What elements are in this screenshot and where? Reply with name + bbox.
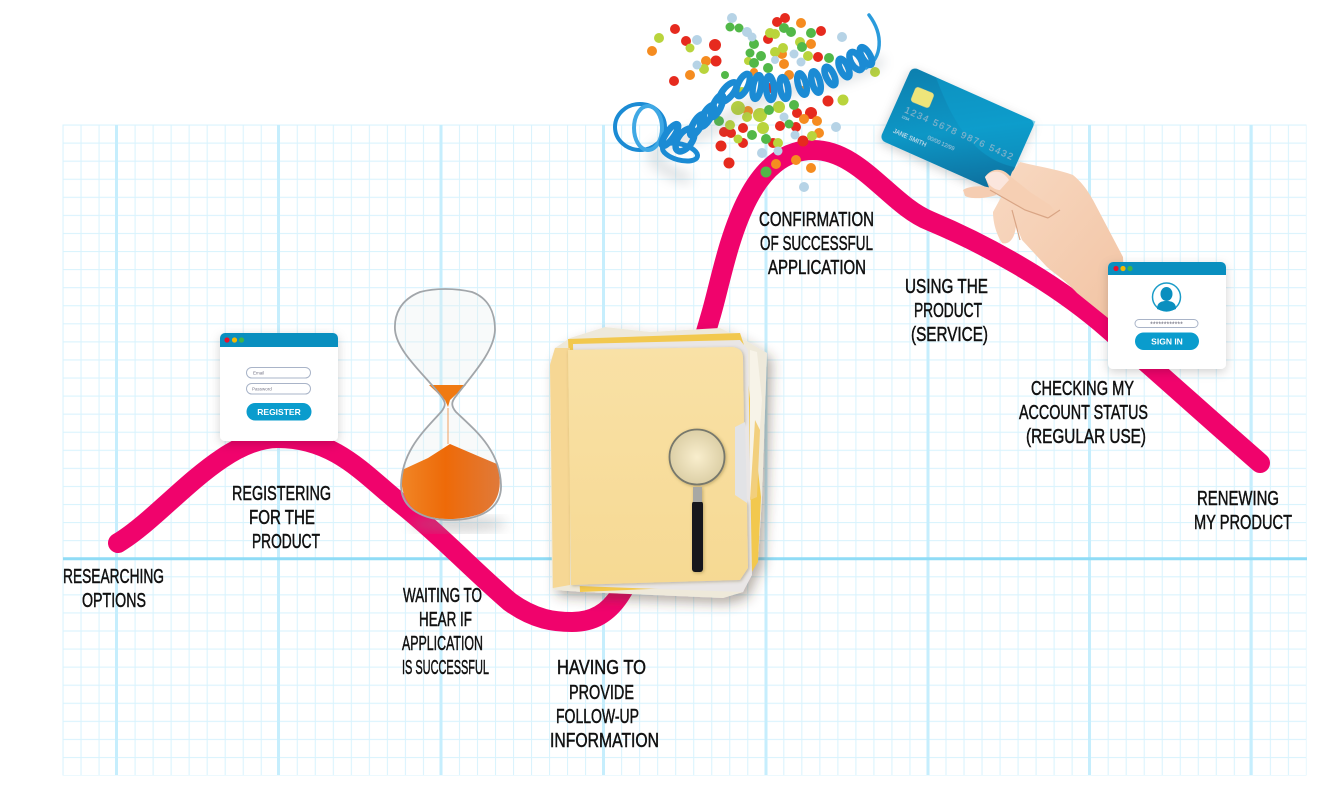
- icon: credit card: 00/00 12/99: [926, 135, 955, 153]
- label: having to provide follow-up information: FOLLOW-UP: [556, 706, 639, 728]
- label: waiting to hear: APPLICATION: [402, 633, 483, 655]
- credit card in hand: [880, 67, 1125, 318]
- glass outline: [395, 289, 501, 520]
- icon: credit card: [880, 67, 1035, 195]
- folder tab: [735, 422, 747, 503]
- streamer ribbon: [615, 15, 879, 178]
- folder front: [568, 347, 748, 585]
- journey curve: [118, 150, 1260, 622]
- label: having to provide follow-up information: [550, 657, 659, 752]
- icon: credit card: JANE SMITH: [892, 129, 927, 149]
- stacked papers: [550, 327, 767, 598]
- bottom sand: [401, 444, 500, 519]
- sign in window: [1108, 262, 1226, 369]
- graph paper grid: [62, 124, 1307, 776]
- hourglass: [395, 289, 506, 532]
- sign in window: ************: [1150, 322, 1183, 328]
- top sand: [429, 385, 466, 407]
- label: renewing my product: MY PRODUCT: [1194, 512, 1292, 534]
- label: having to provide follow-up information: INFORMATION: [550, 730, 659, 752]
- label: using the product: USING THE: [905, 276, 988, 298]
- label: confirmation: OF SUCCESSFUL: [760, 233, 873, 255]
- confetti: [647, 13, 880, 192]
- label: registering for the product: [232, 483, 331, 553]
- label: checking my account status: [1019, 378, 1148, 448]
- register window: Password: [252, 386, 272, 392]
- label: renewing my product: [1194, 488, 1292, 534]
- label: checking my account status: ACCOUNT STATUS: [1019, 402, 1148, 424]
- label: researching options: [63, 566, 164, 612]
- label: using the product: (SERVICE): [911, 324, 988, 346]
- label: renewing my product: RENEWING: [1197, 488, 1279, 510]
- label: checking my account status: (REGULAR USE): [1026, 426, 1146, 448]
- label: waiting to hear: IS SUCCESSFUL: [402, 657, 489, 679]
- register window: REGISTER: [257, 407, 301, 417]
- label: researching options: OPTIONS: [82, 590, 146, 612]
- icon: credit card: 1234 5678 9876 5432: [903, 105, 1016, 163]
- label: having to provide follow-up information: HAVING TO: [557, 657, 646, 679]
- magnifier: [670, 430, 724, 572]
- label: waiting to hear: HEAR IF: [419, 609, 472, 631]
- label: researching options: RESEARCHING: [63, 566, 164, 588]
- sign in window: SIGN IN: [1151, 336, 1183, 346]
- folders with magnifier: [550, 327, 767, 598]
- register window: Email: [253, 370, 264, 376]
- label: confirmation: [759, 209, 874, 279]
- label: confirmation: APPLICATION: [768, 257, 866, 279]
- icon: credit card: 1234: [901, 115, 910, 122]
- label: having to provide follow-up information: PROVIDE: [569, 682, 634, 704]
- label: using the product: PRODUCT: [914, 300, 982, 322]
- icon: hand: [963, 162, 1125, 318]
- label: registering for the product: PRODUCT: [252, 531, 320, 553]
- label: waiting to hear: [402, 585, 489, 679]
- label: confirmation: CONFIRMATION: [759, 209, 874, 231]
- label: registering for the product: FOR THE: [249, 507, 315, 529]
- label: checking my account status: CHECKING MY: [1031, 378, 1134, 400]
- label: using the product: [905, 276, 988, 346]
- label: registering for the product: REGISTERING: [232, 483, 331, 505]
- register window: [220, 333, 338, 441]
- label: waiting to hear: WAITING TO: [403, 585, 482, 607]
